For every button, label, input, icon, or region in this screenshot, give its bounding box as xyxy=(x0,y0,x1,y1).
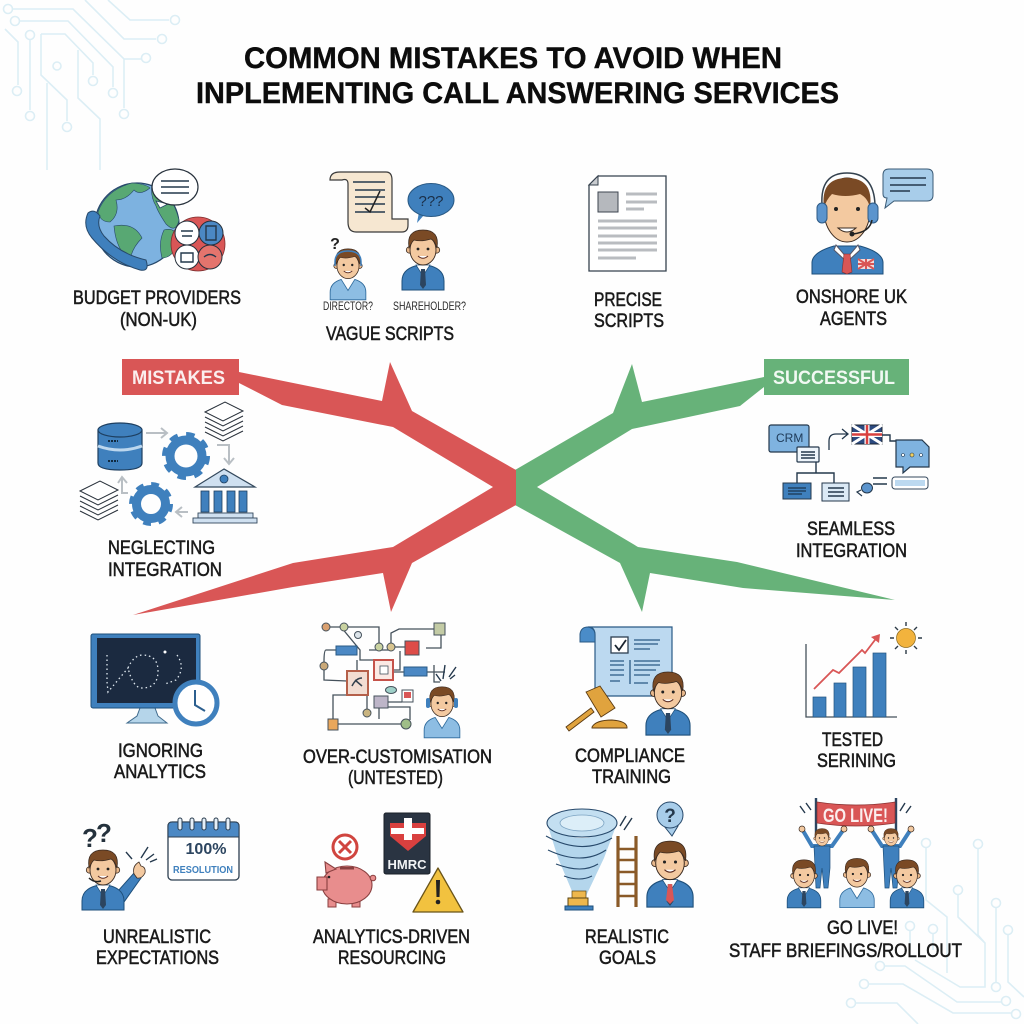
icon: gavel xyxy=(566,686,627,731)
arrows: data flow xyxy=(118,428,234,517)
label xyxy=(817,730,896,772)
icon: gears xyxy=(132,434,208,524)
icon: question bubble xyxy=(408,184,454,223)
panel: unrealistic expectations xyxy=(82,818,239,969)
label: OVER-CUSTOMISATION xyxy=(303,747,492,768)
icon: pointing agent: ? xyxy=(96,818,112,848)
label: NEGLECTING xyxy=(108,538,215,559)
panel: compliance training xyxy=(566,627,690,788)
icon: compliance document xyxy=(580,627,672,696)
panel: over-customisation xyxy=(303,623,492,789)
label: INTEGRATION xyxy=(108,560,222,581)
icon: stressed agent xyxy=(424,665,460,738)
icon: trainer figure xyxy=(646,672,690,735)
badge: successful xyxy=(764,359,909,395)
icon: piggy bank xyxy=(317,862,376,907)
label: RESOURCING xyxy=(338,948,446,969)
label: AGENTS xyxy=(820,309,887,330)
label: COMPLIANCE xyxy=(575,746,685,767)
icon: document xyxy=(589,176,666,271)
icon: cheering team xyxy=(787,803,924,908)
title: COMMON MISTAKES TO AVOID WHEN xyxy=(244,42,782,75)
label xyxy=(114,741,206,783)
label: BUDGET PROVIDERS xyxy=(73,288,241,309)
title xyxy=(196,42,839,110)
label: SERINING xyxy=(817,751,896,772)
icon: clock xyxy=(175,682,217,724)
panel: seamless integration xyxy=(769,425,929,562)
label: INTEGRATION xyxy=(796,541,907,562)
icon: warning triangle xyxy=(413,868,463,912)
label xyxy=(729,918,962,962)
caption: shareholder: SHAREHOLDER? xyxy=(393,299,466,313)
panel: realistic goals xyxy=(546,802,693,969)
icon: crm flow diagram xyxy=(769,425,929,501)
icon: calendar: 100% xyxy=(186,841,226,858)
label xyxy=(575,746,685,788)
icon: tornado on trophy xyxy=(546,809,632,910)
panel: go live xyxy=(729,798,962,962)
icon: calendar xyxy=(168,818,239,880)
icon: agent with headset xyxy=(812,173,883,274)
arrow: red mistakes fork xyxy=(133,362,516,615)
panel: tested serining xyxy=(806,622,922,772)
label: ONSHORE UK xyxy=(796,287,907,308)
icon: shareholder figure xyxy=(402,230,444,290)
label: IGNORING xyxy=(118,741,203,762)
label xyxy=(313,927,470,969)
icon: hmrc badge: HMRC xyxy=(388,857,427,872)
label: ANALYTICS-DRIVEN xyxy=(313,927,470,948)
panel: onshore uk agents xyxy=(796,169,933,330)
icon: hmrc badge xyxy=(384,813,430,874)
icon: question bubble: ??? xyxy=(418,193,444,210)
icon: paper stacks xyxy=(80,402,243,520)
icon: go live banner xyxy=(816,798,896,833)
label: REALISTIC xyxy=(585,927,669,948)
label xyxy=(796,287,907,330)
label: STAFF BRIEFINGS/ROLLOUT xyxy=(729,941,962,962)
icon: uk flag xyxy=(852,425,882,444)
label: VAGUE SCRIPTS xyxy=(326,324,454,345)
label: SCRIPTS xyxy=(594,311,664,332)
decoration: circuit top left xyxy=(4,0,180,170)
icon: sun xyxy=(890,622,922,654)
panel: ignoring analytics xyxy=(91,634,217,783)
icon: manager figure xyxy=(647,841,693,907)
label: ANALYTICS xyxy=(114,762,206,783)
icon: bank building xyxy=(193,469,257,523)
label xyxy=(108,538,222,581)
icon: calendar: RESOLUTION xyxy=(173,865,233,876)
icon: go live banner: GO LIVE! xyxy=(823,806,888,827)
label xyxy=(96,927,219,969)
decoration: circuit bottom right xyxy=(846,838,1024,1024)
badge: mistakes xyxy=(122,359,239,395)
label xyxy=(303,747,492,789)
panel: analytics-driven resourcing xyxy=(313,813,470,969)
icon: director figure: ? xyxy=(330,236,340,253)
icon: database xyxy=(98,423,142,470)
label: (UNTESTED) xyxy=(348,768,443,789)
label: UNREALISTIC xyxy=(103,927,211,948)
label: GO LIVE! xyxy=(827,918,898,939)
label: EXPECTATIONS xyxy=(96,948,219,969)
label: GOALS xyxy=(599,948,656,969)
icon: crm flow diagram: CRM xyxy=(776,431,803,445)
icon: pointing agent xyxy=(82,818,157,910)
panel: precise scripts xyxy=(589,176,666,332)
icon: tangled flow diagram xyxy=(320,623,445,730)
label xyxy=(796,519,907,562)
icon: monitor xyxy=(91,634,200,723)
icon: parchment scroll xyxy=(330,172,408,232)
label: (NON-UK) xyxy=(120,310,197,331)
panel: budget providers xyxy=(73,169,241,331)
icon: question bulb: ? xyxy=(664,806,676,827)
caption: director: DIRECTOR? xyxy=(323,299,373,313)
icon: question bulb xyxy=(657,802,683,836)
icon: speech bubble xyxy=(883,169,933,208)
label: SEAMLESS xyxy=(807,519,895,540)
icon: ladder xyxy=(618,836,636,907)
icon: pointing agent: ? xyxy=(82,823,98,853)
icon: no entry circle xyxy=(333,835,357,859)
icon: director figure xyxy=(330,236,366,300)
label xyxy=(585,927,669,969)
badge: mistakes: MISTAKES xyxy=(132,368,225,389)
arrow: green successful fork xyxy=(515,364,895,612)
label: TESTED xyxy=(822,730,883,751)
title: INPLEMENTING CALL ANSWERING SERVICES xyxy=(196,77,839,110)
panel: neglecting integration xyxy=(80,402,257,581)
icon: red service wheel xyxy=(171,217,225,271)
label: TRAINING xyxy=(592,767,671,788)
panel: vague scripts xyxy=(323,172,466,345)
label xyxy=(73,288,241,331)
chart: rising bars xyxy=(806,634,897,717)
label xyxy=(594,290,664,332)
icon: globe with handset xyxy=(86,169,198,270)
label: PRECISE xyxy=(594,290,662,311)
badge: successful: SUCCESSFUL xyxy=(773,368,895,389)
